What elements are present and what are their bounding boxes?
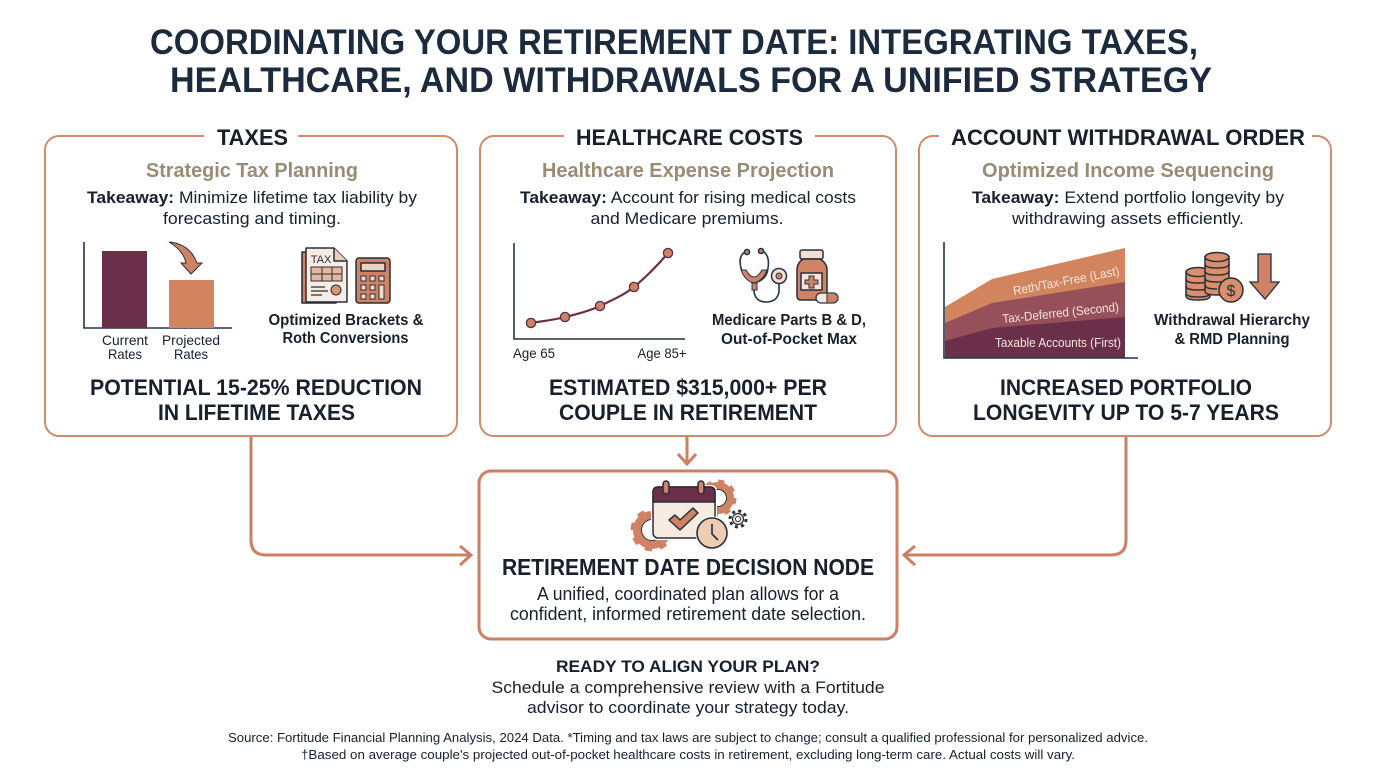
takeaway text: and Medicare premiums. <box>590 209 784 228</box>
panel: retirement date decision node <box>479 471 897 639</box>
heading: healthcare costs: HEALTHCARE COSTS <box>576 125 803 150</box>
icon: tax form and calculator: TAX <box>311 254 332 266</box>
bar chart: current vs projected rates: Rates <box>174 346 208 362</box>
takeaway text: withdrawing assets efficiently. <box>1011 209 1244 228</box>
arrow: healthcare to decision node <box>678 437 696 464</box>
title: COORDINATING YOUR RETIREMENT DATE: INTEGRATING TAXES, <box>150 23 1198 62</box>
icon caption: Medicare Parts B & D, <box>712 312 866 329</box>
bar chart: current vs projected rates <box>84 242 232 362</box>
call to action: Schedule a comprehensive review with a Fortitude <box>492 678 884 697</box>
key figure: ESTIMATED $315,000+ PER <box>549 375 827 400</box>
decision node text: confident, informed retirement date selection. <box>510 604 866 624</box>
panel: account withdrawal order <box>919 125 1331 436</box>
arrow: taxes to decision node <box>251 437 471 565</box>
icon: tax form and calculator <box>302 248 390 303</box>
subheading: healthcare expense projection: Healthcare Expense Projection <box>542 160 834 182</box>
line chart: cost growth <box>513 243 686 361</box>
source footnote: †Based on average couple's projected out-of-pocket healthcare costs in retirement, excluding long-term care. Actual costs will vary. <box>301 747 1075 762</box>
icon caption <box>712 312 866 348</box>
bar chart: current vs projected rates: Current <box>102 332 148 348</box>
key figure: LONGEVITY UP TO 5-7 YEARS <box>973 400 1279 425</box>
takeaway text <box>87 188 418 228</box>
takeaway text: Takeaway: Minimize lifetime tax liability by <box>87 188 418 207</box>
line chart: cost growth: Age 85+ <box>638 345 686 361</box>
takeaway text <box>520 188 856 228</box>
key figure <box>90 375 422 425</box>
icon caption: & RMD Planning <box>1174 331 1290 348</box>
icon caption <box>1154 312 1310 348</box>
icon: calendar, clock and gears <box>633 481 746 549</box>
bar chart: current vs projected rates: Rates <box>108 346 142 362</box>
takeaway text: Takeaway: Account for rising medical costs <box>520 188 856 207</box>
icon: coins and down arrow <box>1186 252 1279 302</box>
key figure: IN LIFETIME TAXES <box>158 400 355 425</box>
stacked area chart: withdrawal order <box>944 242 1138 358</box>
icon: stethoscope and medicine bottle <box>740 248 838 303</box>
icon caption: Withdrawal Hierarchy <box>1154 312 1310 329</box>
icon caption: Roth Conversions <box>282 330 408 347</box>
decision node heading: RETIREMENT DATE DECISION NODE <box>502 554 874 580</box>
arrow: reduction <box>169 242 202 274</box>
stacked area chart: withdrawal order: Reth/Tax-Free (Last) <box>1012 264 1121 298</box>
title: HEALTHCARE, AND WITHDRAWALS FOR A UNIFIED STRATEGY <box>170 61 1212 100</box>
panel: taxes <box>45 125 457 436</box>
title <box>150 23 1212 100</box>
takeaway text: Takeaway: Extend portfolio longevity by <box>972 188 1285 207</box>
heading: taxes: TAXES <box>217 125 288 150</box>
icon caption <box>268 312 424 347</box>
call to action: READY TO ALIGN YOUR PLAN? <box>556 657 820 676</box>
decision node text <box>510 584 866 624</box>
source footnote: Source: Fortitude Financial Planning Analysis, 2024 Data. *Timing and tax laws are subject to change; consult a qualified professional for personalized advice. <box>228 730 1148 745</box>
key figure: POTENTIAL 15-25% REDUCTION <box>90 375 422 400</box>
subheading: strategic tax planning: Strategic Tax Planning <box>146 160 358 182</box>
stacked area chart: withdrawal order: Tax-Deferred (Second) <box>1002 300 1119 326</box>
key figure <box>973 375 1279 425</box>
key figure: COUPLE IN RETIREMENT <box>559 400 817 425</box>
bar chart: current vs projected rates: Projected <box>162 332 220 348</box>
arrow: withdrawals to decision node <box>904 437 1126 565</box>
panel: healthcare costs <box>480 125 896 436</box>
icon caption: Out-of-Pocket Max <box>721 331 857 348</box>
icon: coins and down arrow: $ <box>1227 283 1236 300</box>
call to action: advisor to coordinate your strategy today. <box>527 698 849 717</box>
call to action <box>492 657 884 717</box>
key figure: INCREASED PORTFOLIO <box>1000 375 1252 400</box>
subheading: optimized income sequencing: Optimized Income Sequencing <box>982 160 1274 182</box>
source footnote <box>228 730 1148 762</box>
takeaway text: forecasting and timing. <box>163 209 341 228</box>
stacked area chart: withdrawal order: Taxable Accounts (First) <box>995 336 1121 350</box>
decision node text: A unified, coordinated plan allows for a <box>537 584 840 604</box>
heading: account withdrawal order: ACCOUNT WITHDRAWAL ORDER <box>951 125 1305 150</box>
line chart: cost growth: Age 65 <box>513 345 555 361</box>
icon caption: Optimized Brackets & <box>268 312 424 329</box>
takeaway text <box>972 188 1285 228</box>
key figure <box>549 375 827 425</box>
